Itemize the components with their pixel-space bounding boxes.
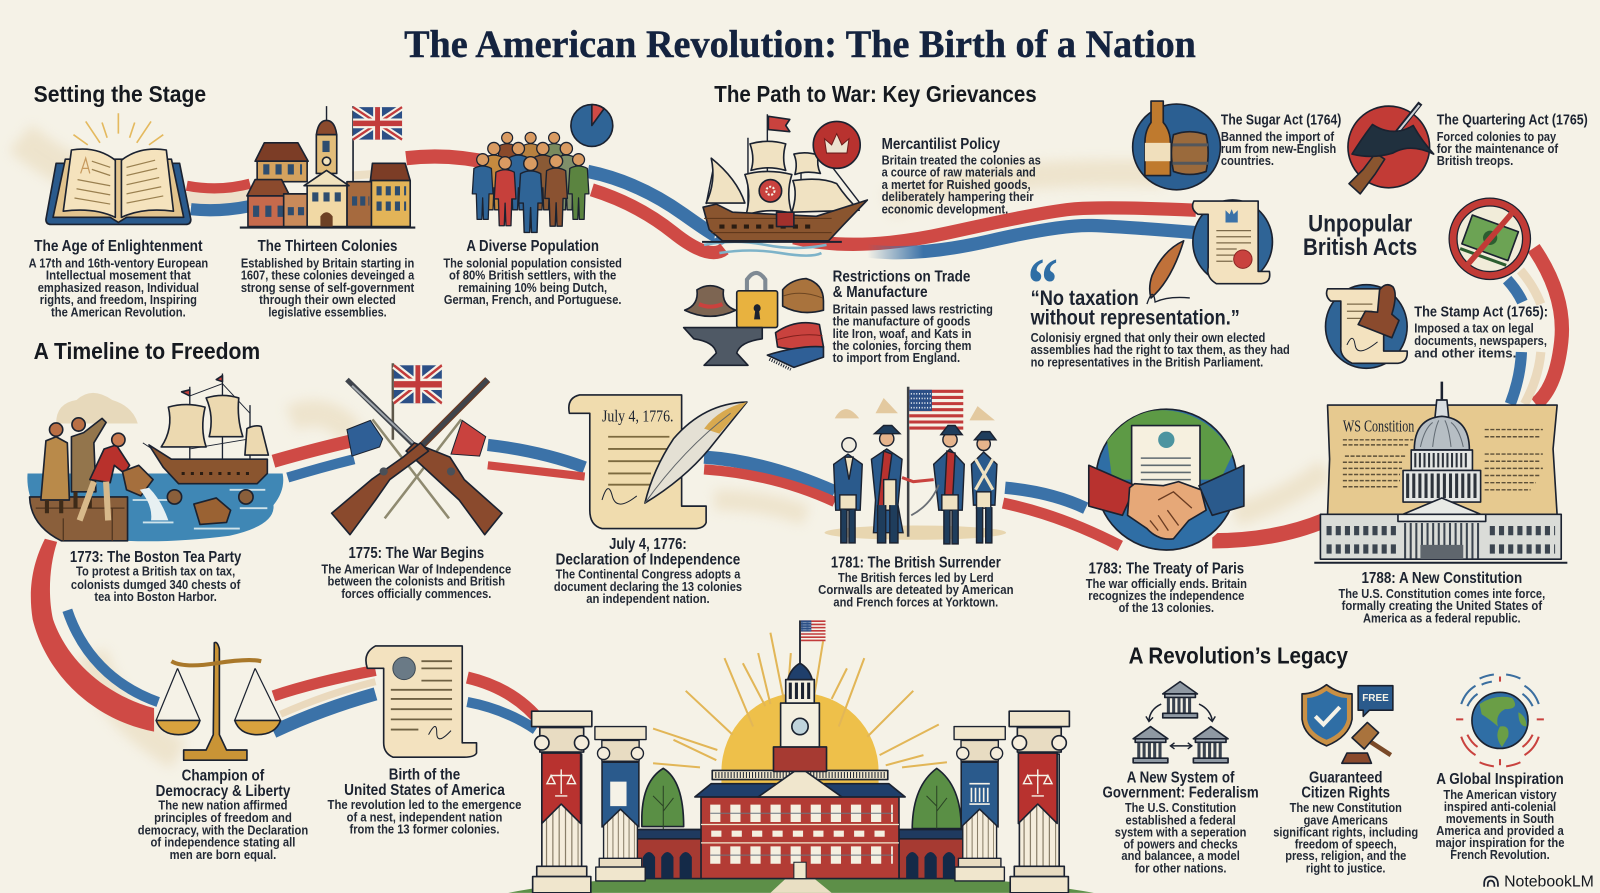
- text: the age of enlightenment: rights, and freedom, Inspiring: [40, 292, 197, 307]
- text: citizen rights: Guaranteed: [1309, 770, 1382, 787]
- text: quartering act: [1437, 112, 1588, 168]
- text: global inspiration: movements in South: [1446, 811, 1554, 826]
- text: 1773 boston tea party: 1773: The Boston Tea Party: [70, 549, 241, 566]
- quote: no taxation: without representation.”: [1030, 305, 1240, 329]
- text: the thirteen colonies: 1607, these colonies deveinged a: [241, 268, 415, 283]
- text: the age of enlightenment: A 17th and 16th-ventory European: [29, 255, 208, 270]
- text: restrictions on trade: Restrictions on Trade: [833, 269, 971, 286]
- text: global inspiration: America and provided a: [1436, 823, 1565, 838]
- text: sugar act: [1221, 112, 1341, 168]
- text: the thirteen colonies: The Thirteen Colonies: [258, 238, 398, 255]
- text: sugar act: countries.: [1221, 153, 1274, 168]
- text: federalism: for other nations.: [1135, 860, 1227, 875]
- text: global inspiration: major inspiration for the: [1436, 835, 1564, 850]
- text: mercantilist policy: a mertet for Ruished goods,: [882, 177, 1031, 192]
- text: mercantilist policy: economic development.: [882, 201, 1008, 216]
- text: birth of the united states: Birth of the: [389, 767, 460, 784]
- text: sugar act: The Sugar Act (1764): [1221, 112, 1341, 128]
- text: stamp act: and other items.: [1414, 346, 1516, 361]
- icon: colonial town with British flag: [240, 106, 415, 228]
- text: champion of democracy: of independence stating all: [151, 835, 295, 850]
- text: quartering act: British treops.: [1437, 153, 1513, 168]
- text: champion of democracy: Democracy & Liberty: [156, 783, 290, 800]
- text: global inspiration: The American vistory: [1443, 787, 1557, 802]
- heading: setting the stage: Setting the Stage: [34, 81, 206, 107]
- text: citizen rights: significant rights, including: [1273, 825, 1418, 840]
- heading: unpopular british acts: [1303, 211, 1417, 261]
- text: a diverse population: remaining 10% being Dutch,: [458, 280, 607, 295]
- text: mercantilist policy: deliberately hampering their: [882, 189, 1034, 204]
- text: champion of democracy: The new nation affirmed: [158, 798, 288, 813]
- text: federalism: The U.S. Constitution: [1125, 800, 1236, 815]
- text: restrictions on trade: the colonies, forcing them: [833, 338, 971, 353]
- quote: no taxation: “No taxation: [1031, 286, 1139, 310]
- text: july 4 1776 declaration: Declaration of Independence: [556, 551, 740, 568]
- icon: royal decree scroll: [1193, 200, 1272, 284]
- text: mercantilist policy: Britain treated the colonies as: [882, 152, 1041, 167]
- text: 1775 the war begins: 1775: The War Begins: [348, 545, 484, 562]
- text: the thirteen colonies: [241, 238, 415, 319]
- text: 1788 new constitution: The U.S. Constitution comes inte force,: [1339, 586, 1545, 601]
- icon: quill pen: [1147, 241, 1190, 304]
- text: 1788 new constitution: America as a federal republic.: [1363, 610, 1521, 625]
- quote: no taxation: [1028, 243, 1290, 369]
- text: a diverse population: German, French, and Portuguese.: [444, 292, 621, 307]
- text: birth of the united states: United States of America: [344, 782, 505, 799]
- text: birth of the united states: of a nest, independent nation: [347, 809, 502, 824]
- text: a diverse population: [443, 238, 622, 307]
- text: july 4 1776 declaration: document declaring the 13 colonies: [554, 579, 742, 594]
- text: citizen rights: right to justice.: [1306, 860, 1386, 875]
- text: citizen rights: Citizen Rights: [1301, 784, 1390, 801]
- heading: a timeline to freedom: A Timeline to Freedom: [34, 338, 260, 364]
- text: 1775 the war begins: The American War of Independence: [321, 561, 511, 576]
- text: federalism: of powers and checks: [1123, 836, 1238, 851]
- text: the age of enlightenment: the American Revolution.: [51, 304, 186, 319]
- text: stamp act: Imposed a tax on legal: [1414, 321, 1534, 336]
- quote: no taxation: “: [1028, 243, 1058, 324]
- text: 1788 new constitution: 1788: A New Constitution: [1361, 570, 1522, 587]
- text: 1773 boston tea party: To protest a British tax on tax,: [76, 564, 235, 579]
- icon: tax stamp and document: [1326, 285, 1407, 368]
- text: global inspiration: [1436, 771, 1565, 862]
- text: champion of democracy: democracy, with the Declaration: [138, 822, 308, 837]
- text: 1783 treaty of paris: [1086, 560, 1247, 615]
- text: federalism: system with a seperation: [1115, 825, 1247, 840]
- title: The American Revolution: The Birth of a Nation: [404, 23, 1196, 66]
- icon: open book: [46, 113, 191, 224]
- icon: federalism temples: [1133, 682, 1228, 763]
- text: birth of the united states: from the 13 former colonies.: [349, 822, 499, 837]
- icon: Capitol building and Constitution parchment: WS Constition: [1343, 417, 1414, 436]
- text: citizen rights: press, religion, and the: [1285, 848, 1406, 863]
- illustration: Independence Hall with rising sun, columns and banners: [508, 620, 1094, 893]
- panel: a timeline to freedom: [27, 338, 1567, 625]
- icon: globe with radiating signals: [1456, 674, 1544, 766]
- text: stamp act: documents, newspapers,: [1414, 333, 1547, 348]
- text: birth of the united states: [328, 767, 521, 837]
- text: july 4 1776 declaration: an independent nation.: [586, 591, 710, 606]
- text: global inspiration: inspired anti-colenial: [1444, 799, 1556, 814]
- text: global inspiration: A Global Inspiration: [1436, 771, 1564, 788]
- text: citizen rights: freedom of speech,: [1295, 836, 1397, 851]
- icon: population pie chart: [571, 105, 613, 146]
- text: 1773 boston tea party: colonists dumged 340 chests of: [71, 577, 241, 592]
- text: restrictions on trade: Britain passed laws restricting: [833, 301, 993, 316]
- text: a diverse population: The solonial population consisted: [443, 255, 622, 270]
- icon: Declaration of Independence scroll with quill: [569, 395, 747, 529]
- text: 1783 treaty of paris: 1783: The Treaty of Paris: [1089, 560, 1244, 577]
- text: 1773 boston tea party: [70, 549, 241, 604]
- icon: soldiers and American flag at Yorktown: [824, 387, 1006, 544]
- text: champion of democracy: Champion of: [182, 768, 265, 785]
- quote: no taxation: no representatives in the British Parliament.: [1031, 354, 1263, 369]
- heading: a revolution's legacy: A Revolution’s Legacy: [1129, 642, 1348, 668]
- text: july 4 1776 declaration: The Continental Congress adopts a: [556, 567, 741, 582]
- text: 1775 the war begins: [321, 545, 511, 601]
- panel: birth of a nation: [138, 620, 1094, 893]
- text: stamp act: The Stamp Act (1765):: [1414, 304, 1548, 320]
- icon: crossed-out money: [1451, 200, 1529, 278]
- text: 1788 new constitution: formally creating the United States of: [1342, 598, 1543, 613]
- text: 1781 british surrender: and French forces at Yorktown.: [833, 595, 998, 610]
- text: 1783 treaty of paris: The war officially ends. Britain: [1086, 576, 1247, 591]
- icon: tricorn hat and musket: [1348, 103, 1434, 194]
- text: july 4 1776 declaration: July 4, 1776:: [609, 536, 687, 553]
- text: champion of democracy: [138, 768, 308, 862]
- icon: rum bottle and barrel: [1133, 101, 1220, 190]
- text: federalism: established a federal: [1126, 812, 1236, 827]
- text: mercantilist policy: Mercantilist Policy: [882, 136, 1000, 153]
- text: quartering act: Forced colonies to pay: [1437, 129, 1557, 144]
- text: citizen rights: gave Americans: [1304, 812, 1388, 827]
- text: citizen rights: [1273, 770, 1418, 875]
- text: the age of enlightenment: emphasized reason, Individual: [38, 280, 199, 295]
- text: restrictions on trade: lite Iron, woaf, and Kats in: [833, 326, 972, 341]
- text: 1781 british surrender: The British ferces led by Lerd: [838, 570, 994, 585]
- text: the thirteen colonies: legislative essemblies.: [268, 304, 387, 319]
- text: 1783 treaty of paris: of the 13 colonies.: [1119, 600, 1214, 615]
- icon: shield, FREE speech bubble and gavel: FREE: [1362, 693, 1389, 704]
- icon: Capitol building and Constitution parchment: [1314, 382, 1567, 563]
- text: mercantilist policy: [882, 136, 1041, 216]
- text: the age of enlightenment: [29, 238, 208, 319]
- text: citizen rights: The new Constitution: [1290, 800, 1402, 815]
- text: mercantilist policy: a cource of raw materials and: [882, 165, 1036, 180]
- text: 1775 the war begins: between the colonists and British: [328, 574, 505, 589]
- text: the age of enlightenment: Intellectual mosement that: [46, 268, 191, 283]
- text: a diverse population: A Diverse Population: [466, 238, 599, 255]
- text: federalism: [1103, 770, 1259, 875]
- logo: NotebookLM: NotebookLM: [1504, 874, 1594, 891]
- text: champion of democracy: principles of freedom and: [154, 810, 292, 825]
- quote: no taxation: assemblies had the right to tax them, as they had: [1031, 342, 1290, 357]
- icon: sailing ship with royal seal: [702, 114, 867, 256]
- heading: the path to war: The Path to War: Key Grievances: [714, 81, 1037, 107]
- text: federalism: and balancee, a model: [1121, 848, 1240, 863]
- text: stamp act: [1414, 304, 1548, 361]
- text: birth of the united states: The revolution led to the emergence: [328, 797, 521, 812]
- text: 1783 treaty of paris: recognizes the independence: [1088, 588, 1244, 603]
- icon: Declaration of Independence scroll with quill: July 4, 1776.: [602, 406, 673, 425]
- text: july 4 1776 declaration: [554, 536, 742, 606]
- text: 1773 boston tea party: tea into Boston Harbor.: [94, 589, 217, 604]
- panel: setting the stage: [29, 81, 622, 319]
- text: quartering act: for the maintenance of: [1437, 141, 1559, 156]
- text: restrictions on trade: to import from England.: [833, 350, 960, 365]
- text: sugar act: Banned the import of: [1221, 129, 1335, 144]
- text: a diverse population: of 80% British settlers, with the: [449, 268, 616, 283]
- ribbon: winding red, white and blue path: [20, 138, 1562, 755]
- panel: the path to war: [684, 81, 1290, 369]
- text: the thirteen colonies: strong sense of self-government: [241, 280, 415, 295]
- icon: shield, FREE speech bubble and gavel: [1302, 685, 1393, 763]
- icon: crossed muskets and flags: [332, 363, 502, 535]
- text: restrictions on trade: [833, 269, 993, 365]
- text: global inspiration: French Revolution.: [1450, 847, 1550, 862]
- icon: crowd of diverse settlers: [472, 132, 589, 232]
- panel: a revolution's legacy: [1103, 642, 1565, 875]
- text: the age of enlightenment: The Age of Enlightenment: [34, 238, 203, 255]
- text: 1781 british surrender: 1781: The British Surrender: [831, 554, 1001, 571]
- text: champion of democracy: men are born equal.: [170, 847, 276, 862]
- text: federalism: Government: Federalism: [1103, 784, 1259, 801]
- icon: founding charter scroll: [366, 646, 477, 757]
- text: sugar act: rum from new-English: [1221, 141, 1336, 156]
- icon: scales of justice: [156, 642, 281, 760]
- text: federalism: A New System of: [1127, 770, 1235, 787]
- heading: unpopular british acts: British Acts: [1303, 234, 1417, 261]
- text: 1781 british surrender: Cornwalls are deteated by American: [818, 582, 1014, 597]
- text: restrictions on trade: the manufacture of goods: [833, 314, 970, 329]
- text: the thirteen colonies: Established by Britain starting in: [241, 255, 414, 270]
- icon: Boston Tea Party scene: [27, 373, 283, 541]
- icon: handshake over globe: [1089, 407, 1244, 552]
- text: 1775 the war begins: forces officially commences.: [341, 586, 491, 601]
- quote: no taxation: Colonisiy ergned that only their own elected: [1031, 330, 1265, 345]
- text: the thirteen colonies: through their own elected: [259, 292, 396, 307]
- text: 1788 new constitution: [1339, 570, 1545, 625]
- text: restrictions on trade: & Manufacture: [833, 284, 928, 301]
- panel: unpopular British acts: [1133, 101, 1588, 368]
- icon: trade goods, padlock and anvil: [684, 273, 823, 369]
- heading: unpopular british acts: Unpopular: [1308, 211, 1413, 238]
- text: 1781 british surrender: [818, 554, 1014, 610]
